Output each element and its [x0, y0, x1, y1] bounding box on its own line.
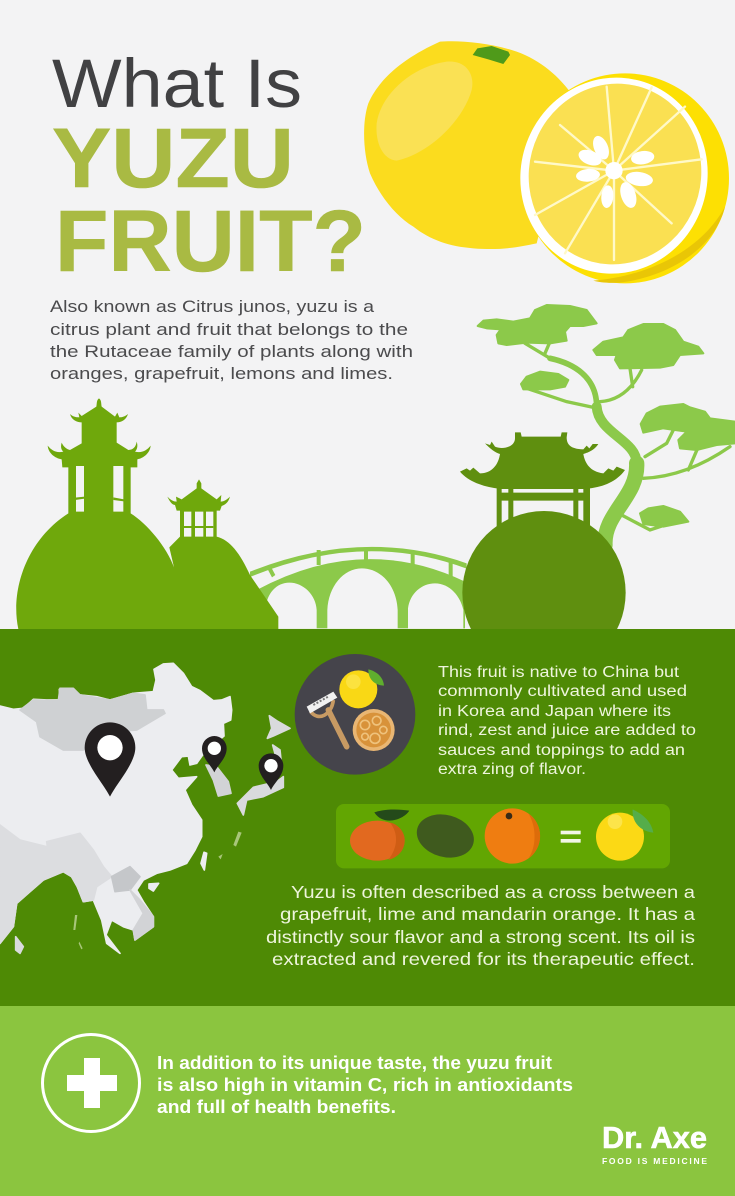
text: flavor description [266, 882, 695, 969]
icon: orange [485, 808, 540, 864]
whole yuzu [364, 41, 573, 249]
location pin: China [85, 722, 135, 797]
intro text [50, 298, 413, 383]
location pin: Japan [259, 753, 283, 790]
text: native to China: in Korea and Japan where its [438, 703, 671, 720]
text: native to China [438, 664, 696, 778]
text: benefits: and full of health benefits. [157, 1097, 396, 1117]
intro text: oranges, grapefruit, lemons and limes. [50, 365, 393, 383]
panel: health benefits [0, 1006, 735, 1196]
icon: plus in circle [42, 1034, 140, 1132]
title [52, 45, 366, 290]
icon: yuzu [596, 809, 653, 861]
illustration: bridge [250, 547, 467, 628]
title: FRUIT? [55, 193, 366, 290]
panel: origin [0, 629, 735, 1006]
icon: lime [412, 808, 479, 864]
cut yuzu half [498, 57, 730, 295]
intro text: Also known as Citrus junos, yuzu is a [50, 298, 375, 316]
intro text: citrus plant and fruit that belongs to the [50, 321, 408, 339]
icon: peeler, yuzu and zest bowl [295, 654, 415, 775]
text: native to China: rind, zest and juice are added to [438, 722, 696, 739]
text: native to China: sauces and toppings to add an [438, 742, 685, 759]
logo: Dr. Axe: Dr. Axe [602, 1120, 707, 1155]
icon: equals [561, 831, 581, 843]
text: native to China: extra zing of flavor. [438, 761, 586, 778]
title: YUZU [52, 111, 294, 205]
text: flavor description: distinctly sour flavor and a strong scent. Its oil is [266, 927, 695, 947]
icon: mandarin [350, 809, 409, 861]
illustration: left pagoda hill [16, 398, 278, 629]
text: native to China: This fruit is native to China but [438, 664, 680, 681]
text: flavor description: grapefruit, lime and mandarin orange. It has a [280, 904, 695, 924]
text: flavor description: extracted and revered for its therapeutic effect. [272, 949, 695, 969]
title: What Is [52, 45, 302, 122]
illustration: bonsai tree [478, 305, 735, 545]
fruit equation [336, 804, 670, 868]
illustration: yuzu fruits [364, 41, 730, 295]
text: benefits [157, 1053, 573, 1117]
intro text: the Rutaceae family of plants along with [50, 343, 413, 361]
map of East Asia [0, 663, 290, 953]
text: benefits: In addition to its unique taste, the yuzu fruit [157, 1053, 552, 1073]
location pin: Korea [202, 736, 227, 772]
illustration: right pavilion hill [460, 432, 626, 674]
text: benefits: is also high in vitamin C, rich in antioxidants [157, 1075, 573, 1095]
text: native to China: commonly cultivated and used [438, 683, 687, 700]
logo: Dr. Axe: FOOD IS MEDICINE [602, 1156, 707, 1166]
text: flavor description: Yuzu is often described as a cross between a [291, 882, 695, 902]
